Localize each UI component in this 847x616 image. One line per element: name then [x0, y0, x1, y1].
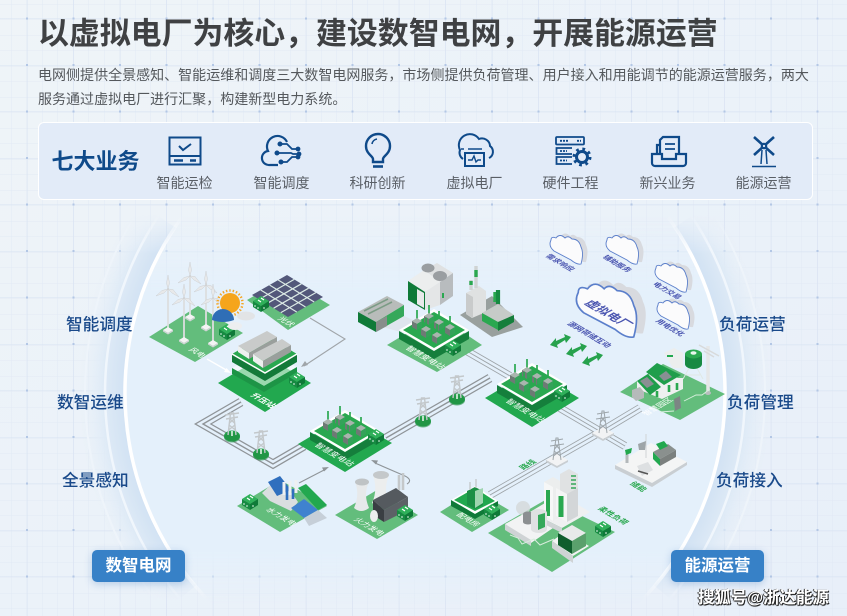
- satellite clouds: 用电优化: [653, 317, 688, 338]
- top smart substation: [387, 305, 482, 372]
- wind farm: 风电: [186, 346, 209, 359]
- satellite clouds: 辅助服务: [600, 253, 635, 274]
- label: 数智运维: 数智运维: [57, 393, 124, 412]
- solar farm: 光伏: [275, 315, 298, 328]
- label: 新兴业务: [640, 174, 696, 190]
- panel heading: 七大业务: [52, 148, 140, 174]
- label: 智能调度: 智能调度: [66, 315, 133, 334]
- thermal plant: 火力发电: [352, 516, 388, 537]
- panel: seven businesses: [38, 122, 812, 200]
- label: 全景感知: 全景感知: [62, 471, 129, 490]
- charging and storage station: [615, 434, 687, 493]
- booster station: 升压站: [248, 392, 279, 410]
- label: 负荷管理: 负荷管理: [727, 393, 794, 412]
- business item: energy operation: [736, 136, 792, 190]
- intro paragraph: 服务通过虚拟电厂进行汇聚，构建新型电力系统。: [38, 91, 346, 107]
- icon: servers with gear: [555, 136, 592, 166]
- label: 智能运检: [156, 174, 212, 190]
- business item: research: [350, 132, 406, 190]
- smart park: [620, 345, 725, 420]
- icon: wind turbine: [752, 136, 776, 168]
- top smart substation: 智慧变电站: [403, 344, 448, 371]
- satellite clouds: 电力交易: [650, 280, 685, 301]
- chimney factory: [460, 266, 523, 337]
- label: 科研创新: [350, 174, 406, 190]
- middle smart substation: [485, 359, 579, 427]
- business item: virtual power plant: [446, 133, 502, 190]
- business item: emerging: [640, 136, 696, 190]
- booster station: [218, 331, 311, 412]
- virtual power plant cloud: [565, 280, 646, 349]
- lower smart substation: 智慧变电站: [312, 441, 357, 468]
- button: 数智电网: 数智电网: [106, 557, 172, 575]
- charging and storage station: 储能: [627, 480, 650, 493]
- button: 能源运营: 能源运营: [684, 557, 750, 575]
- flexible load campus: [488, 469, 632, 572]
- title: 以虚拟电厂为核心，建设数智电网，开展能源运营: [38, 16, 718, 51]
- label: 负荷接入: 负荷接入: [716, 471, 783, 490]
- icon: document tray: [650, 136, 688, 168]
- arrows between stations: [207, 318, 410, 484]
- button: 数智电网: [92, 550, 185, 582]
- middle smart substation: 智慧变电站: [503, 397, 548, 424]
- business item: dispatch: [254, 134, 310, 190]
- cooling unit building: [408, 263, 453, 310]
- green double arrows: [550, 334, 603, 366]
- gray green building: [358, 296, 418, 333]
- hydro plant: 水力发电: [264, 506, 300, 527]
- transmission towers: [224, 376, 614, 468]
- virtual power plant cloud: 源网荷储互动: [565, 320, 614, 349]
- power lines: [203, 350, 640, 495]
- icon: light bulb: [364, 132, 392, 168]
- thermal plant: [335, 471, 418, 539]
- label: 虚拟电厂: [446, 174, 502, 190]
- satellite clouds: [543, 234, 694, 338]
- flexible load campus: 柔性负荷: [596, 505, 632, 526]
- label: 硬件工程: [542, 174, 598, 190]
- solar farm: [247, 275, 330, 330]
- power distribution room: [440, 479, 509, 532]
- business item: inspection: [156, 136, 212, 190]
- smart park: 智慧园区: [640, 396, 675, 417]
- business item: hardware: [542, 136, 598, 190]
- line label: 路线: [516, 458, 539, 471]
- lower smart substation: [298, 406, 392, 472]
- label: 负荷运营: 负荷运营: [719, 315, 786, 334]
- intro paragraph: 电网侧提供全景感知、智能运维和调度三大数智电网服务，市场侧提供负荷管理、用户接入和用能调节的能源运营服务，两大: [38, 67, 809, 83]
- virtual power plant cloud: 虚拟电厂: [581, 297, 637, 330]
- power distribution room: 配电房: [454, 511, 483, 528]
- button: 能源运营: [671, 550, 764, 582]
- watermark: 搜狐号@浙达能源: [698, 589, 829, 607]
- icon: cloud with screen: [458, 133, 494, 167]
- intro paragraph: [38, 67, 809, 107]
- icon: monitor with check: [168, 136, 202, 166]
- weather icons: sun, earth, clouds: [212, 290, 255, 330]
- satellite clouds: 需求响应: [543, 252, 578, 273]
- icon: cloud with flow lines: [260, 134, 302, 166]
- wind farm: [149, 262, 243, 362]
- label: 智能调度: [254, 174, 310, 190]
- label: 能源运营: [736, 174, 792, 190]
- hydro plant: [237, 476, 327, 532]
